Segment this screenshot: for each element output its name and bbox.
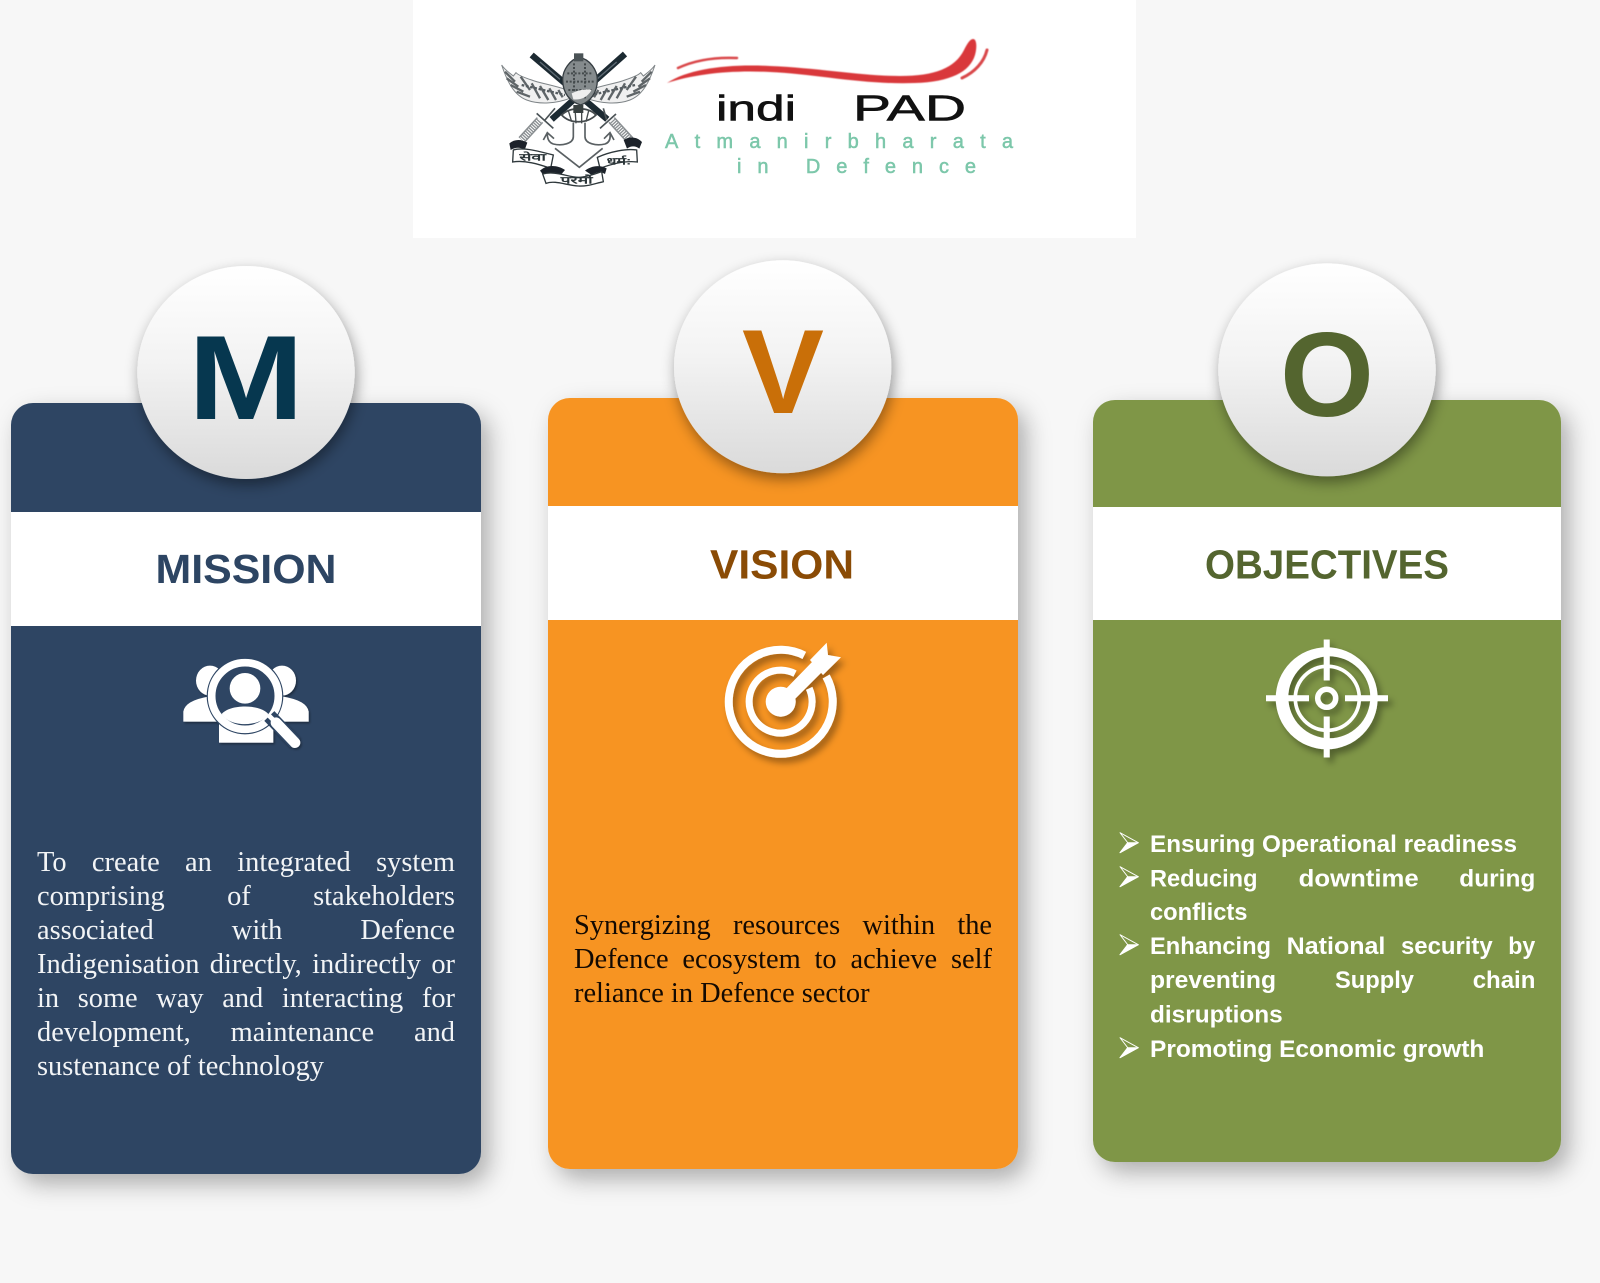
vision body text — [574, 910, 992, 1009]
logo wordmark: Atmanirbharata — [665, 131, 1014, 153]
objectives bullet list: conflicts — [1150, 899, 1248, 926]
objectives bullet list: downtime — [1299, 866, 1419, 892]
vision letter disc — [674, 260, 891, 473]
mission body text: To create an integrated system — [37, 847, 455, 878]
mission heading band — [11, 512, 481, 626]
vision heading band: VISION — [710, 542, 854, 588]
mission body text: development, maintenance and — [37, 1017, 455, 1048]
icon: people search — [183, 658, 309, 743]
logo wordmark: in Defence — [737, 156, 976, 178]
panel: objectives — [1093, 263, 1561, 1162]
mission letter disc — [137, 266, 355, 479]
mission body text: comprising of stakeholders — [37, 881, 455, 912]
logo wordmark: PAD — [853, 88, 966, 129]
icon: crosshair — [1266, 640, 1388, 758]
mission heading band: MISSION — [156, 546, 336, 592]
objectives bullet list: preventing — [1150, 967, 1276, 994]
bullet markers — [1120, 833, 1138, 1058]
objectives bullet list: Reducing — [1150, 866, 1258, 892]
logo panel — [413, 0, 1136, 238]
mission body text: Indigenisation directly, indirectly or — [37, 949, 455, 980]
emblem motto: परमो — [559, 173, 593, 186]
swoosh — [667, 39, 987, 83]
objectives heading band — [1093, 507, 1561, 620]
objectives bullet list: during — [1459, 866, 1535, 892]
logo wordmark: indi — [716, 88, 796, 129]
vision body text: reliance in Defence sector — [574, 978, 870, 1009]
vision heading band — [548, 506, 1018, 620]
objectives bullet list: National — [1287, 933, 1385, 960]
objectives bullet list: Supply — [1335, 967, 1415, 994]
objectives bullet list: chain — [1473, 967, 1535, 994]
objectives bullet list — [1120, 831, 1536, 1063]
objectives bullet list: Enhancing — [1150, 933, 1271, 960]
emblem motto — [518, 151, 631, 186]
panel: vision — [548, 260, 1018, 1169]
objectives bullet list: disruptions — [1150, 1002, 1283, 1028]
mission body text: in some way and interacting for — [37, 983, 455, 1014]
mission body text: associated with Defence — [37, 915, 455, 946]
icon: armed forces emblem — [502, 53, 655, 186]
icon: target with arrow — [729, 643, 841, 754]
vision body text: Synergizing resources within the — [574, 910, 992, 941]
objectives letter disc — [1218, 263, 1436, 476]
panel: mission — [11, 266, 481, 1174]
objectives bullet list: Promoting Economic growth — [1150, 1036, 1484, 1063]
vision letter disc: V — [742, 305, 824, 439]
objectives bullet list: security — [1401, 933, 1493, 960]
mission body text: sustenance of technology — [37, 1051, 324, 1082]
emblem motto: सेवा — [518, 151, 547, 164]
objectives heading band: OBJECTIVES — [1205, 542, 1449, 588]
objectives letter disc: O — [1280, 308, 1374, 442]
vision body text: Defence ecosystem to achieve self — [574, 944, 992, 975]
objectives bullet list: Ensuring Operational readiness — [1150, 831, 1517, 858]
objectives bullet list: by — [1508, 933, 1536, 960]
logo wordmark — [665, 88, 1014, 178]
mission letter disc: M — [188, 311, 304, 445]
emblem motto: धर्म: — [607, 155, 631, 168]
mission body text — [37, 847, 455, 1082]
